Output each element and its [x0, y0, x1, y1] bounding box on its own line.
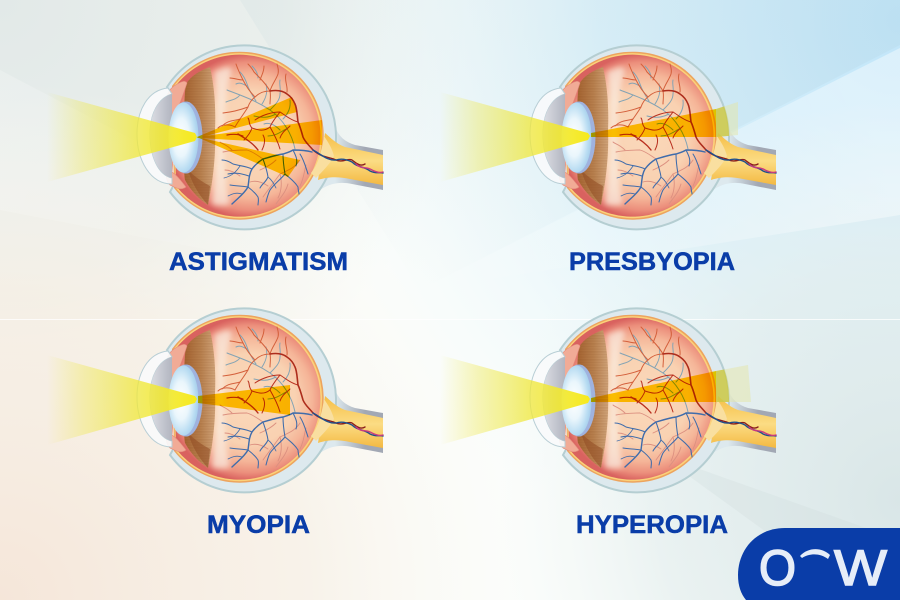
eye diagram: myopia: [47, 308, 383, 492]
beam focus past the retina: [716, 102, 738, 137]
astigmatism split refracted beams: [197, 97, 322, 177]
logo letter O: O: [759, 540, 796, 596]
eye diagram: presbyopia: [440, 45, 776, 229]
eye diagram: hyperopia: [440, 308, 776, 492]
label: presbyopia: PRESBYOPIA: [569, 248, 735, 276]
incoming light cone: [440, 355, 590, 445]
logo letter W: W: [834, 540, 888, 596]
hyperopia refracted beam: [591, 371, 716, 402]
logo badge: [738, 528, 900, 600]
myopia refracted beam: [198, 385, 290, 415]
incoming light cone: [47, 355, 197, 445]
incoming light cone: [440, 92, 590, 182]
eye diagram: astigmatism: [47, 45, 383, 229]
label: astigmatism: ASTIGMATISM: [169, 248, 348, 276]
logo arc: [800, 549, 830, 559]
label: myopia: MYOPIA: [207, 511, 310, 539]
presbyopia refracted beam: [591, 109, 716, 137]
label: hyperopia: HYPEROPIA: [576, 511, 728, 539]
beam focus past the retina: [716, 365, 751, 402]
incoming light cone: [47, 92, 197, 182]
